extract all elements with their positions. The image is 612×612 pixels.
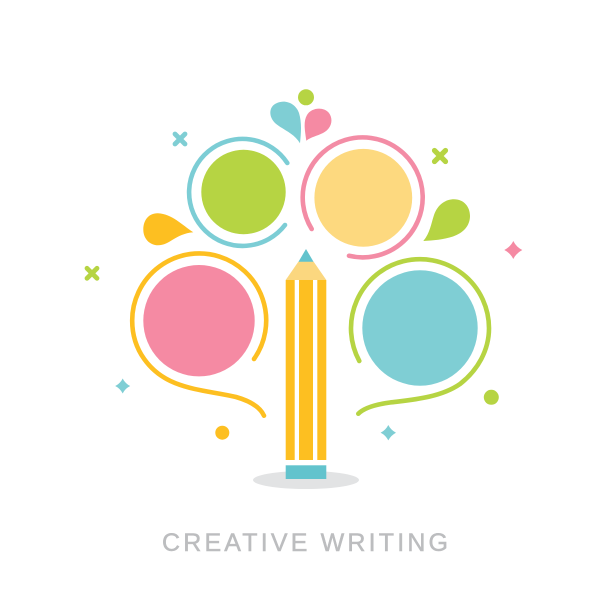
pink circle — [143, 265, 255, 376]
pencil wood tip — [286, 262, 326, 280]
cross: green upper right — [434, 150, 446, 162]
orange ring with tail — [132, 253, 266, 416]
teal ring — [189, 139, 287, 246]
pencil body stripes — [286, 280, 326, 460]
drop: orange — [143, 213, 193, 245]
icon: pencil — [286, 249, 326, 479]
drop: green — [423, 199, 470, 241]
title: CREATIVE WRITING — [162, 529, 448, 557]
bubble: lower left pink — [132, 253, 266, 416]
pink ring — [303, 137, 423, 257]
sparkle: pink right — [504, 241, 522, 259]
drop: teal — [270, 102, 301, 143]
green ring with tail — [351, 259, 489, 414]
sparkle: teal bottom — [381, 425, 396, 440]
pencil lead — [298, 249, 314, 262]
cross: teal — [175, 134, 185, 144]
pencil eraser — [286, 465, 326, 479]
sparkle: teal left — [115, 378, 130, 394]
bubble: top right yellow — [303, 137, 423, 257]
pencil shadow — [253, 471, 359, 489]
bubble: top left green — [189, 139, 287, 246]
dot: green top — [298, 89, 314, 105]
cross: green left — [87, 268, 97, 278]
dot: orange — [215, 426, 229, 440]
teal circle — [362, 270, 478, 386]
green circle — [201, 150, 286, 234]
drop: pink — [305, 109, 331, 141]
dot: green — [484, 390, 499, 405]
yellow circle — [314, 149, 412, 247]
bubble: lower right teal — [351, 259, 489, 414]
